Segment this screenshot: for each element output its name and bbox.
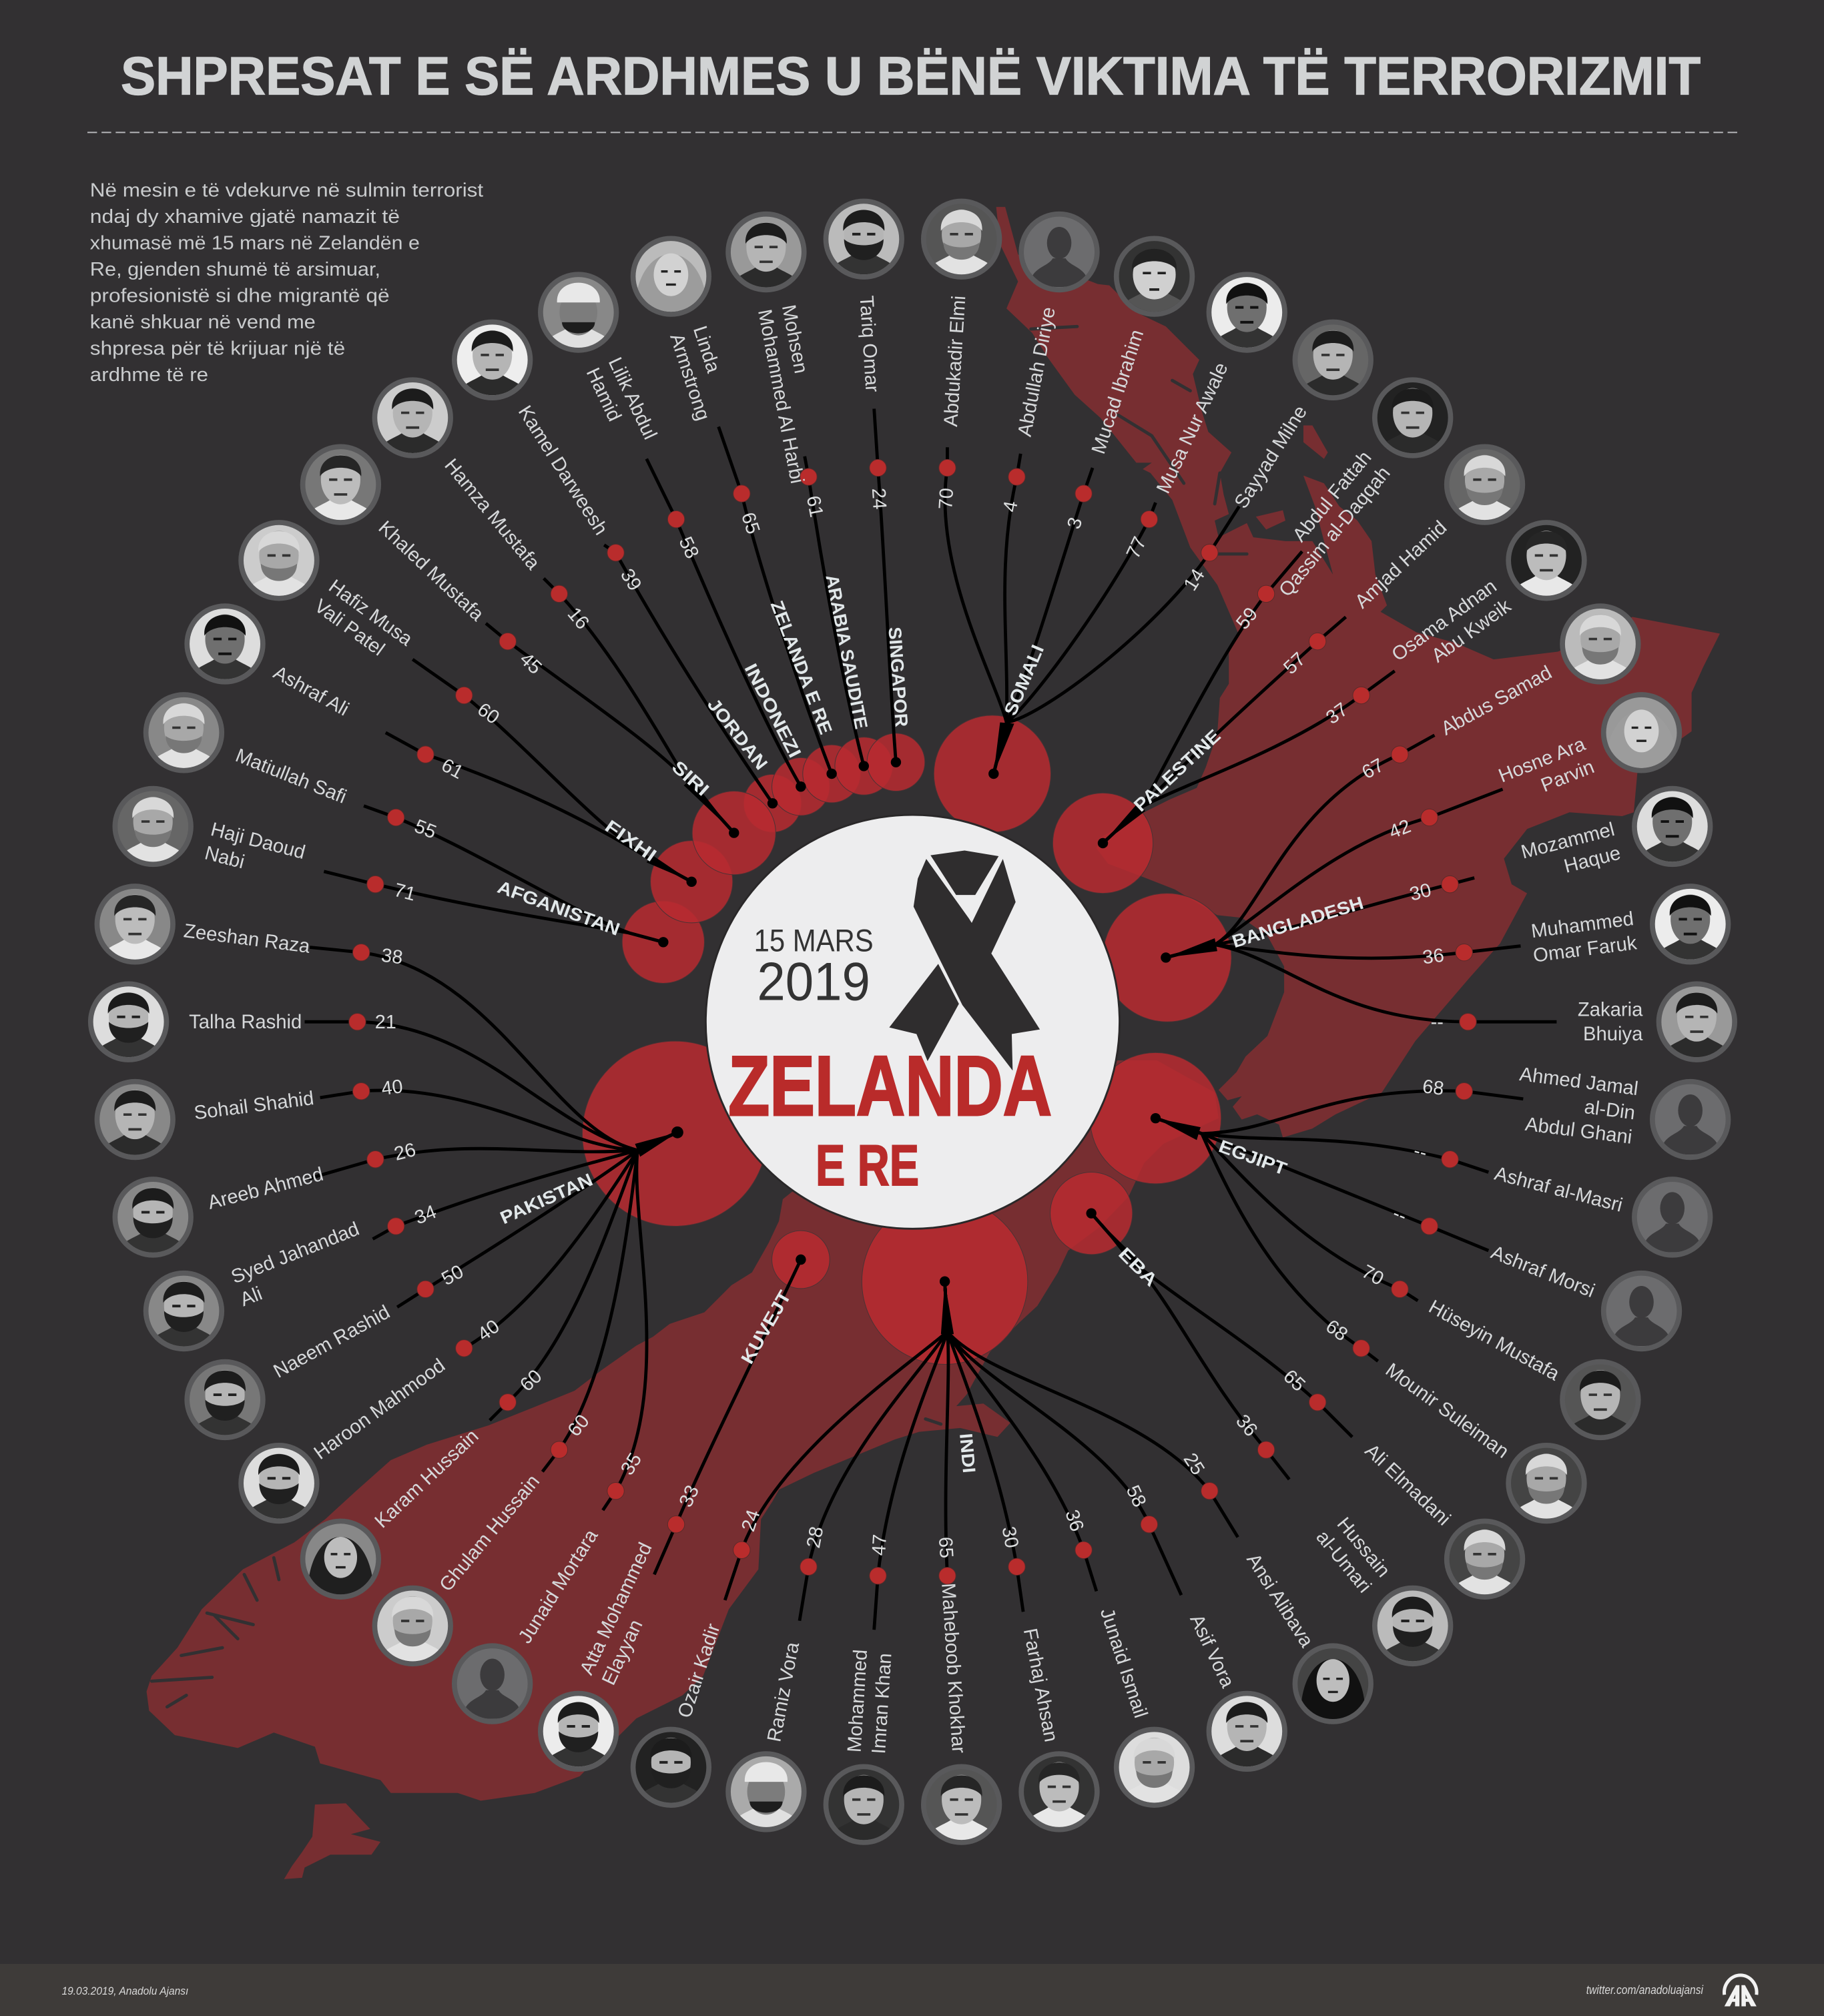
name: Karam Hussain bbox=[371, 1425, 483, 1532]
country labels: INDI bbox=[956, 1433, 979, 1474]
center circle: E RE bbox=[816, 1134, 919, 1198]
name: Ashraf al-Masri bbox=[1492, 1163, 1624, 1217]
portrait bbox=[1442, 444, 1528, 534]
name: Maheboob Khokhar bbox=[937, 1582, 969, 1754]
victim: Ali Elmadani bbox=[1091, 1213, 1528, 1608]
name: Nabi bbox=[202, 842, 247, 873]
country labels: KUVEJT bbox=[737, 1287, 795, 1367]
victim: Hussain al-Umari bbox=[1091, 1213, 1456, 1675]
name: Ahmed Jamal bbox=[1518, 1064, 1639, 1100]
portrait bbox=[1601, 1271, 1682, 1351]
victim: Hosne Ara Parvin: 42 bbox=[1386, 815, 1414, 844]
footer bbox=[0, 1964, 1824, 2016]
name: Talha Rashid bbox=[189, 1012, 302, 1033]
center circle bbox=[705, 815, 1120, 1229]
victim: Ansi Alibava: 25 bbox=[1179, 1449, 1209, 1479]
country labels: SINGAPOR bbox=[884, 626, 912, 727]
name: Ali Elmadani bbox=[1361, 1440, 1454, 1530]
portrait bbox=[536, 272, 621, 362]
victim: Tariq Omar: 24 bbox=[868, 487, 890, 510]
portrait bbox=[110, 786, 196, 876]
victim: Hussain al-Umari: 36 bbox=[1231, 1411, 1261, 1441]
portrait bbox=[919, 199, 1004, 288]
name: Haroon Mahmood bbox=[310, 1355, 449, 1464]
intro text block: kanë shkuar në vend me bbox=[90, 312, 316, 333]
victim: Junaid Ismail bbox=[945, 1281, 1197, 1816]
name: Hamza Mustafa bbox=[440, 455, 544, 575]
portrait bbox=[1111, 236, 1197, 326]
name: Elayyan bbox=[598, 1616, 647, 1688]
name: Farhaj Ahsan bbox=[1019, 1626, 1062, 1744]
country labels: BANGLADESH bbox=[1230, 893, 1366, 952]
victim: Sayyad Milne bbox=[994, 320, 1376, 773]
victim: Kamel Darweesh bbox=[450, 320, 773, 803]
country labels: ZELANDA E RE bbox=[767, 598, 836, 737]
portrait bbox=[919, 1764, 1004, 1854]
victim: Ghulam Hussain: 60 bbox=[564, 1411, 594, 1441]
name: Abdul Ghani bbox=[1524, 1114, 1633, 1148]
victim: Abdul Fattah Qassim al-Daqqah: 59 bbox=[1232, 603, 1262, 633]
name: Ashraf Morsi bbox=[1488, 1242, 1598, 1302]
portrait bbox=[1648, 884, 1733, 974]
name: Musa Nur Awale bbox=[1153, 360, 1233, 497]
victim: Ansi Alibava bbox=[945, 1281, 1374, 1733]
name: Ramiz Vora bbox=[764, 1640, 804, 1744]
victim: Farhaj Ahsan: 30 bbox=[997, 1525, 1022, 1550]
waiheke island bbox=[1256, 511, 1285, 530]
victim: Ozair Kadir: 24 bbox=[737, 1507, 765, 1534]
portrait bbox=[450, 320, 535, 409]
victim: Khaled Mustafa: 45 bbox=[515, 649, 546, 679]
name: Sayyad Milne bbox=[1231, 402, 1311, 513]
victim: Maheboob Khokhar bbox=[919, 1281, 1004, 1854]
portrait bbox=[1442, 1519, 1528, 1608]
victim: Hamza Mustafa bbox=[370, 377, 734, 833]
name: Abdus Samad bbox=[1438, 662, 1556, 740]
intro text block bbox=[90, 180, 483, 386]
name: Khaled Mustafa bbox=[374, 517, 488, 626]
portrait bbox=[821, 1764, 906, 1854]
name: Hafiz Musa bbox=[324, 576, 416, 651]
portrait bbox=[236, 520, 322, 610]
victim: Syed Jahandad Ali: 34 bbox=[412, 1201, 440, 1229]
country labels: JORDAN bbox=[703, 695, 772, 773]
country labels: EGJIPT bbox=[1216, 1136, 1290, 1179]
name: Matiullah Safi bbox=[232, 745, 349, 808]
victim: Ashraf al-Masri bbox=[1155, 1118, 1713, 1258]
icon: agency logo bbox=[1725, 1975, 1757, 2007]
portrait bbox=[92, 1079, 178, 1169]
victim: Ashraf Ali: 61 bbox=[438, 755, 467, 783]
country circles bbox=[582, 715, 1231, 1364]
victim: Haji Daoud Nabi bbox=[110, 786, 663, 942]
name: Parvin bbox=[1538, 756, 1597, 797]
victim: Zeeshan Raza bbox=[92, 884, 677, 1150]
name: Omar Faruk bbox=[1532, 932, 1638, 967]
intro text block: xhumasë më 15 mars në Zelandën e bbox=[90, 233, 420, 254]
portrait bbox=[1632, 1177, 1713, 1258]
name: Zakaria bbox=[1578, 1000, 1643, 1021]
victim: Haji Daoud Nabi: 71 bbox=[392, 880, 418, 906]
portrait bbox=[298, 444, 383, 534]
name: Hamid bbox=[582, 364, 625, 424]
victim: Mounir Suleiman bbox=[1155, 1118, 1589, 1533]
victim: Ramiz Vora: 28 bbox=[803, 1525, 828, 1550]
victim: Abdullah Diriye bbox=[994, 212, 1100, 773]
intro text block: shpresa për të krijuar një të bbox=[90, 338, 345, 360]
name: Junaid Ismail bbox=[1096, 1606, 1151, 1720]
name: Tariq Omar bbox=[856, 295, 883, 393]
portrait bbox=[236, 1443, 322, 1533]
name: Amjad Hamid bbox=[1351, 517, 1451, 613]
victim: Ashraf Morsi: -- bbox=[1390, 1203, 1410, 1227]
country labels: EBA bbox=[1115, 1243, 1161, 1291]
portrait bbox=[1650, 1079, 1731, 1160]
victim: Hamza Mustafa: 16 bbox=[563, 603, 593, 633]
victim: Haroon Mahmood: 40 bbox=[474, 1316, 504, 1345]
portrait bbox=[1204, 272, 1289, 362]
date: 15 MARS bbox=[754, 922, 874, 958]
victim: Areeb Ahmed bbox=[110, 1132, 677, 1267]
name: Sohail Shahid bbox=[193, 1088, 315, 1124]
footer: twitter.com/anadoluajansi bbox=[1586, 1983, 1704, 1997]
name: Mohammed Al Harbi bbox=[753, 308, 808, 485]
victim: Musa Nur Awale bbox=[994, 272, 1289, 773]
victim: Naeem Rashid bbox=[182, 1132, 677, 1449]
victim: Ozair Kadir bbox=[628, 1281, 947, 1816]
victim: Ahmed Jamal al-Din Abdul Ghani: 68 bbox=[1421, 1076, 1445, 1100]
name: Kamel Darweesh bbox=[514, 402, 611, 539]
name: al-Umari bbox=[1311, 1527, 1375, 1597]
country labels: PALESTINE bbox=[1130, 725, 1225, 815]
victim: Ashraf Morsi bbox=[1155, 1118, 1682, 1351]
portrait bbox=[1204, 1691, 1289, 1780]
victim: Talha Rashid: 21 bbox=[375, 1012, 396, 1033]
portrait bbox=[1558, 1359, 1643, 1449]
portrait bbox=[370, 1586, 455, 1675]
victim: Abdukadir Elmi: 70 bbox=[935, 487, 958, 510]
portrait bbox=[1293, 1643, 1374, 1733]
victim: Musa Nur Awale: 77 bbox=[1123, 533, 1151, 562]
name: Abdukadir Elmi bbox=[940, 295, 970, 427]
name: Ozair Kadir bbox=[674, 1621, 725, 1720]
victim: Mohsen Mohammed Al Harbi: 61 bbox=[802, 494, 827, 519]
victim: Syed Jahandad Ali bbox=[141, 1132, 677, 1361]
icon: mourning ribbon bbox=[889, 850, 1040, 1070]
portrait bbox=[182, 1359, 268, 1449]
name: Mohammed bbox=[844, 1649, 872, 1753]
victim: Amjad Hamid: 57 bbox=[1279, 649, 1310, 679]
country labels: SOMALI bbox=[1000, 642, 1048, 718]
country labels bbox=[495, 573, 1366, 1474]
name: Mounir Suleiman bbox=[1382, 1359, 1512, 1463]
victim: Karam Hussain: 60 bbox=[516, 1365, 547, 1396]
intro text block: Në mesin e të vdekurve në sulmin terrorist bbox=[90, 180, 483, 202]
name: Ghulam Hussain bbox=[436, 1471, 544, 1596]
center circle: 2019 bbox=[757, 952, 870, 1012]
victim: Ashraf Ali bbox=[182, 603, 691, 882]
intro text block: ndaj dy xhamive gjatë namazit të bbox=[90, 206, 400, 228]
victim: Lilik Abdul Hamid bbox=[536, 272, 801, 787]
name: Mozammel bbox=[1519, 819, 1616, 864]
north island bbox=[996, 207, 1720, 1138]
name: Haji Daoud bbox=[208, 819, 308, 864]
victim: Atta Mohammed Elayyan bbox=[536, 1260, 801, 1780]
portrait bbox=[1290, 320, 1376, 409]
footer: 19.03.2019, Anadolu Ajansı bbox=[61, 1985, 188, 1997]
name: Osama Adnan bbox=[1388, 576, 1501, 666]
portrait bbox=[1504, 520, 1589, 610]
victim: Muhammed Omar Faruk: 36 bbox=[1422, 945, 1446, 968]
victim: Areeb Ahmed: 26 bbox=[392, 1139, 418, 1165]
portrait bbox=[1504, 1443, 1589, 1533]
portrait bbox=[300, 1519, 381, 1608]
victim: Abdul Fattah Qassim al-Daqqah bbox=[1103, 377, 1456, 843]
victim: Amjad Hamid bbox=[1103, 444, 1528, 843]
portrait bbox=[1630, 786, 1715, 876]
stewart island bbox=[284, 1803, 380, 1879]
name: Atta Mohammed bbox=[576, 1540, 657, 1678]
portrait bbox=[631, 236, 711, 326]
victim: Linda Armstrong: 65 bbox=[737, 510, 764, 537]
name: Linda bbox=[689, 324, 724, 376]
victim: Sohail Shahid bbox=[92, 1076, 677, 1169]
victim: Abdullah Diriye: 4 bbox=[999, 499, 1022, 514]
map of New Zealand bbox=[147, 207, 1720, 1879]
victim: Sohail Shahid: 40 bbox=[380, 1076, 404, 1100]
victim: Karam Hussain bbox=[300, 1132, 677, 1608]
victim: Naeem Rashid: 50 bbox=[438, 1261, 467, 1290]
portrait bbox=[628, 1727, 713, 1816]
title: SHPRESAT E SË ARDHMES U BËNË VIKTIMA TË TERRORIZMIT bbox=[121, 47, 1701, 107]
portrait bbox=[141, 1271, 227, 1361]
name: Abdul Fattah bbox=[1289, 447, 1376, 546]
portrait bbox=[86, 982, 172, 1071]
victim: Mucad Ibrahim bbox=[994, 236, 1197, 773]
victim: Atta Mohammed Elayyan: 33 bbox=[675, 1482, 703, 1511]
name: Lilik Abdul bbox=[604, 354, 661, 443]
name: Areeb Ahmed bbox=[206, 1164, 326, 1214]
country labels: INDONEZI bbox=[741, 660, 805, 761]
name: Hussain bbox=[1333, 1514, 1394, 1582]
victim: Mohammed Imran Khan: 47 bbox=[868, 1534, 891, 1556]
victim: Mucad Ibrahim: 3 bbox=[1063, 515, 1087, 532]
victim: Matiullah Safi: 55 bbox=[411, 815, 439, 844]
country labels: FIXHI bbox=[601, 816, 660, 866]
great barrier island bbox=[1303, 426, 1328, 459]
portrait bbox=[370, 377, 455, 467]
name: Muhammed bbox=[1530, 908, 1635, 942]
victim: Zakaria Bhuiya: -- bbox=[1431, 1012, 1444, 1033]
country labels: PAKISTAN bbox=[497, 1170, 596, 1228]
intro text block: Re, gjenden shumë të arsimuar, bbox=[90, 259, 380, 280]
name: Imran Khan bbox=[868, 1652, 896, 1754]
portrait bbox=[1654, 982, 1739, 1071]
victim: Osama Adnan Abu Kweik bbox=[1103, 520, 1589, 843]
name: Haque bbox=[1562, 842, 1623, 878]
south island bbox=[147, 1060, 1219, 1800]
portrait bbox=[452, 1643, 533, 1724]
victim: Kamel Darweesh: 39 bbox=[616, 565, 645, 595]
portrait bbox=[182, 603, 268, 693]
name: Zeeshan Raza bbox=[182, 920, 312, 958]
victim: Mohammed Imran Khan bbox=[821, 1281, 947, 1854]
victim: Abdus Samad bbox=[1166, 603, 1643, 958]
victim: Junaid Mortara: 35 bbox=[617, 1449, 646, 1479]
victim: Hafiz Musa Vali Patel bbox=[236, 520, 691, 882]
country labels: AFGANISTAN bbox=[495, 877, 623, 940]
name: Vali Patel bbox=[310, 595, 388, 660]
victim: Abdukadir Elmi bbox=[919, 199, 1006, 773]
name: Ali bbox=[237, 1283, 265, 1311]
coastal inlets bbox=[151, 326, 1247, 1707]
victim: Osama Adnan Abu Kweik: 37 bbox=[1322, 699, 1352, 729]
hub dots and fan wedges bbox=[635, 722, 1217, 1334]
country labels: SIRI bbox=[668, 757, 713, 800]
country labels: ARABIA SAUDITE bbox=[822, 573, 872, 731]
victim: Ghulam Hussain bbox=[370, 1132, 677, 1675]
victim: Ramiz Vora bbox=[723, 1281, 947, 1841]
name: Mohsen bbox=[778, 303, 812, 375]
victim: Maheboob Khokhar: 65 bbox=[934, 1536, 957, 1559]
name: Abu Kweik bbox=[1428, 595, 1515, 667]
name: Abdullah Diriye bbox=[1014, 305, 1060, 438]
victim: Sayyad Milne: 14 bbox=[1180, 565, 1209, 595]
victim: Ahmed Jamal al-Din Abdul Ghani bbox=[1155, 1064, 1731, 1160]
portrait bbox=[110, 1177, 196, 1267]
victim: Linda Armstrong bbox=[631, 236, 832, 773]
portrait bbox=[1018, 212, 1100, 292]
portrait bbox=[1601, 692, 1682, 782]
name: Armstrong bbox=[665, 331, 713, 423]
intro text block: profesionistë si dhe migrantë që bbox=[90, 286, 390, 307]
victim: Farhaj Ahsan bbox=[945, 1281, 1102, 1841]
victim: Ashraf al-Masri: -- bbox=[1412, 1140, 1429, 1164]
victim: Zakaria Bhuiya bbox=[1166, 945, 1739, 1071]
victim: Asif Vora bbox=[945, 1281, 1289, 1780]
portrait bbox=[723, 212, 809, 301]
name: Hosne Ara bbox=[1496, 733, 1589, 787]
name: Hüseyin Mustafa bbox=[1425, 1296, 1563, 1385]
portrait bbox=[141, 692, 227, 782]
country name: ZELANDA bbox=[728, 1038, 1052, 1133]
name: Bhuiya bbox=[1583, 1024, 1643, 1045]
portrait bbox=[723, 1751, 809, 1841]
victim: Mozammel Haque: 30 bbox=[1408, 880, 1434, 906]
portrait bbox=[1016, 1751, 1102, 1841]
victim: Asif Vora: 58 bbox=[1122, 1482, 1150, 1511]
victim: Hafiz Musa Vali Patel: 60 bbox=[473, 699, 503, 729]
name: Naeem Rashid bbox=[270, 1301, 394, 1383]
portrait bbox=[1370, 377, 1456, 467]
victim: Lilik Abdul Hamid: 58 bbox=[674, 533, 703, 562]
victim: Muhammed Omar Faruk bbox=[1166, 884, 1733, 974]
victim: Junaid Mortara bbox=[452, 1132, 677, 1724]
victim: Junaid Ismail: 36 bbox=[1060, 1507, 1088, 1534]
victim: Khaled Mustafa bbox=[298, 444, 734, 833]
victim: Hosne Ara Parvin bbox=[1166, 692, 1682, 958]
victim: Haroon Mahmood bbox=[236, 1132, 677, 1533]
victim: Mohsen Mohammed Al Harbi bbox=[723, 212, 864, 766]
victim: Talha Rashid bbox=[86, 982, 677, 1150]
name: Junaid Mortara bbox=[515, 1526, 603, 1647]
victim: Mounir Suleiman: 68 bbox=[1321, 1316, 1351, 1345]
name: Asif Vora bbox=[1185, 1611, 1238, 1692]
intro text block: ardhme të re bbox=[90, 364, 208, 386]
victim: Ali Elmadani: 65 bbox=[1279, 1365, 1309, 1396]
portrait bbox=[1370, 1586, 1456, 1675]
name: Ansi Alibava bbox=[1242, 1550, 1317, 1652]
victim: Hüseyin Mustafa: 70 bbox=[1358, 1261, 1387, 1290]
portrait bbox=[1111, 1727, 1197, 1816]
portrait bbox=[92, 884, 178, 974]
name: al-Din bbox=[1583, 1096, 1636, 1124]
portrait bbox=[821, 199, 906, 288]
portrait bbox=[536, 1691, 621, 1780]
portrait bbox=[1558, 603, 1643, 693]
victim: Abdus Samad: 67 bbox=[1358, 755, 1388, 783]
name: Qassim al-Daqqah bbox=[1275, 462, 1395, 601]
name: Ashraf Ali bbox=[270, 662, 352, 721]
victim: Mozammel Haque bbox=[1166, 786, 1715, 958]
victim: Tariq Omar bbox=[821, 199, 906, 762]
victim: Matiullah Safi bbox=[141, 692, 663, 942]
name: Syed Jahandad bbox=[228, 1219, 362, 1288]
victim: Zeeshan Raza: 38 bbox=[380, 945, 404, 968]
name: Mucad Ibrahim bbox=[1088, 327, 1148, 456]
victim: Hüseyin Mustafa bbox=[1155, 1118, 1643, 1449]
